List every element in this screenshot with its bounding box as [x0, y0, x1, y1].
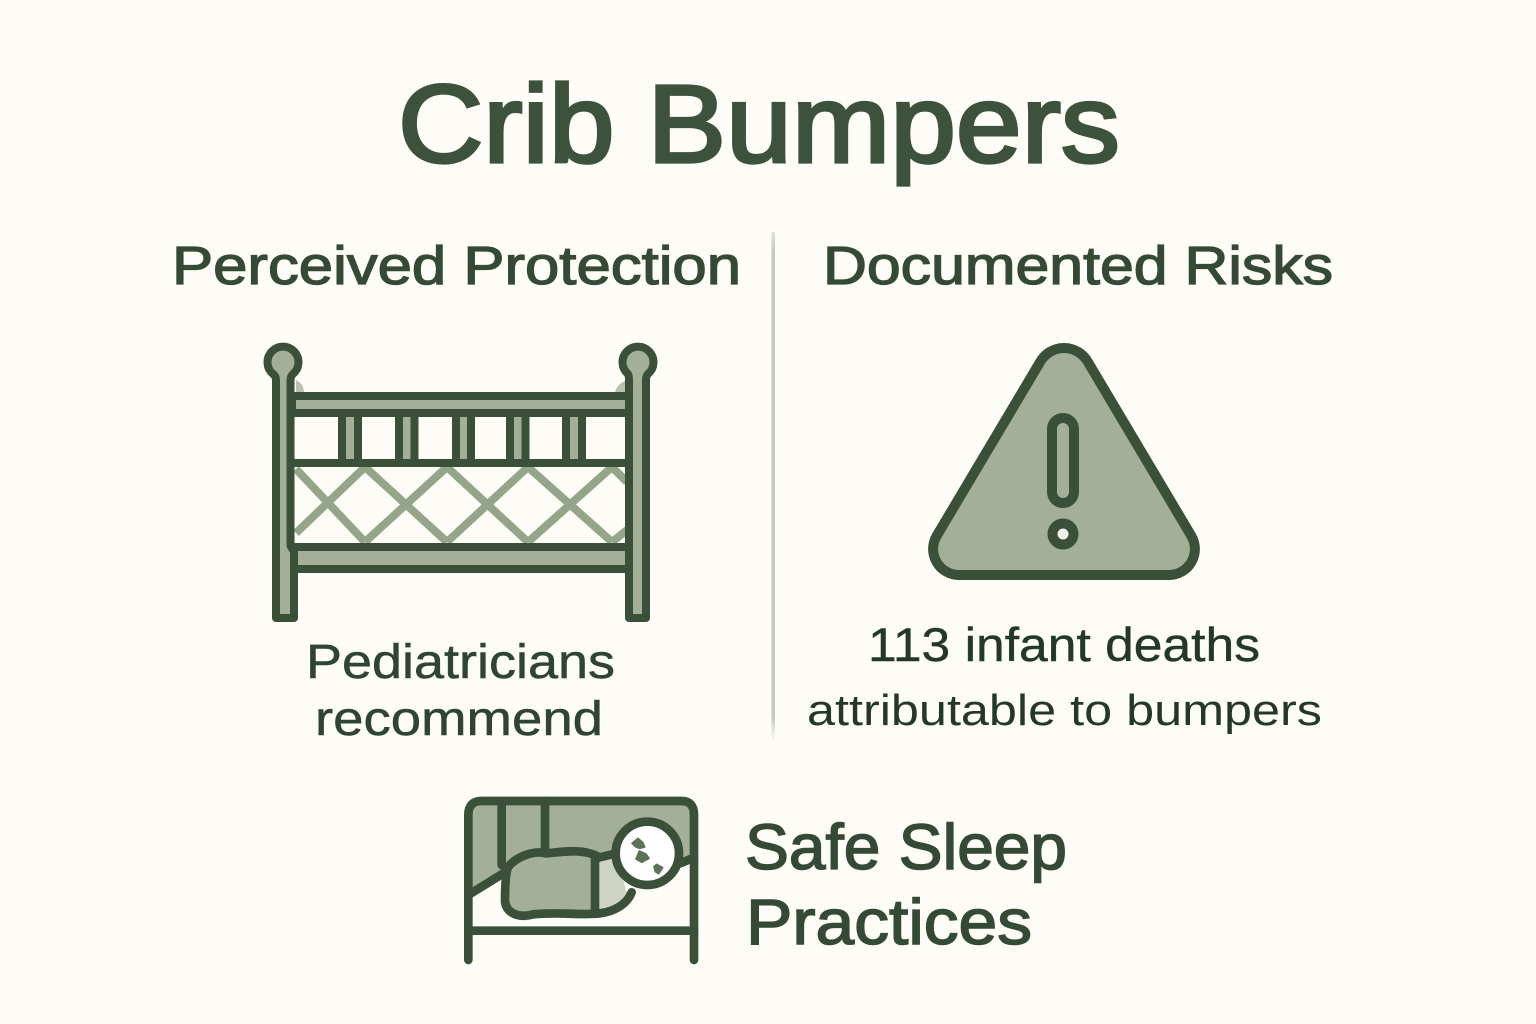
caption: pediatricians recommend: [306, 636, 615, 746]
right post: [622, 347, 653, 618]
icon: warning triangle: [933, 348, 1195, 575]
caption: attributable to bumpers: attributable to bumpers: [807, 686, 1322, 735]
caption: pediatricians recommend: recommend: [315, 693, 603, 746]
panel: documented risks: [807, 236, 1333, 735]
slats: [342, 413, 582, 463]
icon: baby in crib: [468, 801, 694, 960]
post shoulders: [296, 380, 627, 392]
left post: [268, 347, 298, 618]
caption: pediatricians recommend: Pediatricians: [306, 636, 615, 689]
heading: safe sleep practices: Safe Sleep: [745, 811, 1067, 883]
bottom rail: [292, 547, 629, 569]
heading: safe sleep practices: Practices: [746, 886, 1032, 958]
heading: safe sleep practices: [745, 811, 1067, 958]
panel: perceived protection: [172, 236, 741, 746]
lattice: [296, 467, 627, 542]
top rail: [292, 396, 629, 413]
title: Crib Bumpers: [398, 63, 1120, 186]
stat: 113 infant deaths: 113 infant deaths: [868, 618, 1260, 671]
panel: safe sleep practices: [468, 801, 1067, 960]
icon: crib: [268, 347, 653, 618]
heading: documented risks: Documented Risks: [823, 236, 1333, 296]
heading: perceived protection: Perceived Protection: [172, 236, 741, 296]
